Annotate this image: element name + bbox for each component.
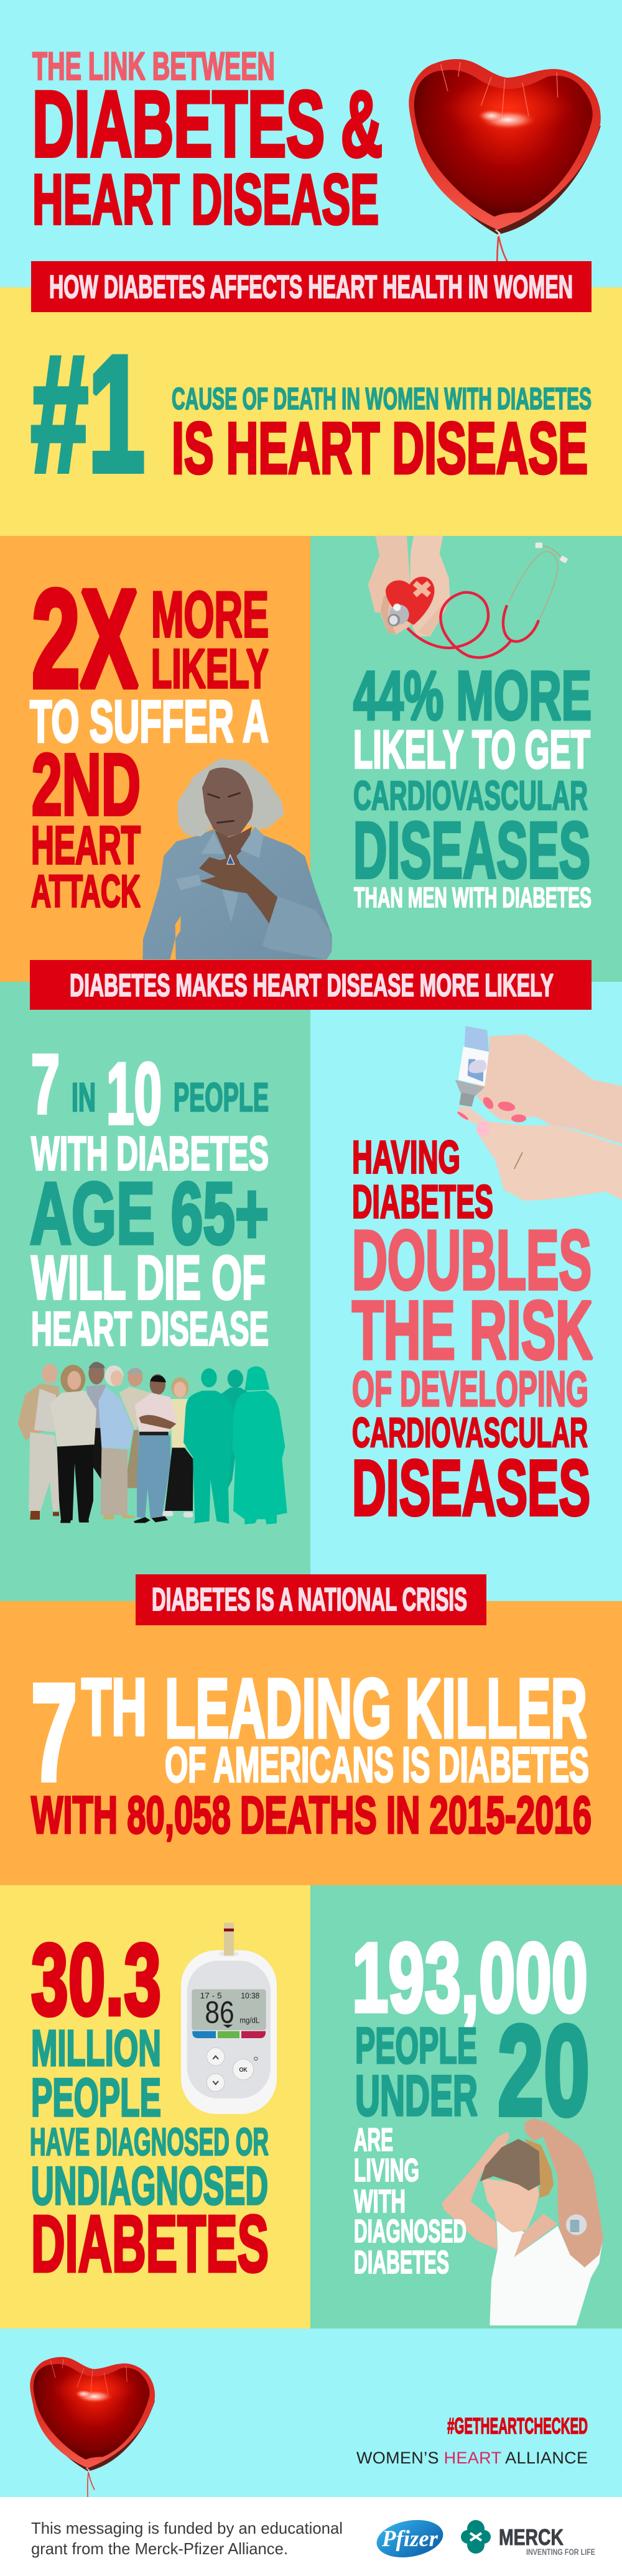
panel: doubles the risk — [310, 982, 622, 1601]
text: 2nd: 2ND — [32, 736, 141, 833]
text: with: WITH — [354, 2184, 406, 2220]
panel: funding footer — [0, 2497, 622, 2576]
text: diabetes: DIABETES — [352, 1175, 493, 1227]
text: having: HAVING — [352, 1132, 460, 1183]
image: hands holding heart with stethoscope — [368, 536, 568, 658]
panel: 7th leading killer — [0, 1601, 622, 1885]
text: have diagnosed or: HAVE DIAGNOSED OR — [30, 2121, 269, 2164]
image: hands using lancet device — [455, 1026, 622, 1201]
stat: 10: 10 — [106, 1045, 162, 1142]
logo: Merck — [461, 2520, 595, 2557]
stat: #1: #1 — [31, 322, 145, 506]
icon: glucose meter: OK — [239, 2067, 248, 2074]
panel: 2x more likely — [0, 536, 332, 982]
panel: 44 percent more likely — [310, 536, 622, 982]
text: under: UNDER — [355, 2064, 478, 2128]
text: with diabetes: WITH DIABETES — [31, 1127, 269, 1180]
image: group of seven older adults with three silhouettes — [17, 1362, 287, 1525]
panel: number one cause — [0, 287, 622, 536]
text: funding statement: grant from the Merck-Pfizer Alliance. — [31, 2539, 288, 2558]
text: million: MILLION — [31, 2020, 161, 2077]
text: people: PEOPLE — [174, 1075, 269, 1120]
text: people: PEOPLE — [31, 2068, 161, 2128]
panel: 30.3 million people — [0, 1885, 310, 2329]
text: undiagnosed: UNDIAGNOSED — [31, 2156, 268, 2216]
text: attack: ATTACK — [31, 867, 141, 916]
panel: closing call to action — [0, 2329, 622, 2498]
icon: glucose meter: 86 — [205, 1995, 234, 2029]
text: living: LIVING — [354, 2153, 419, 2189]
text: diagnosed: DIAGNOSED — [354, 2214, 466, 2250]
heading: the link between: THE LINK BETWEEN — [32, 45, 275, 88]
logo: Pfizer — [374, 2515, 446, 2562]
text: to suffer a: TO SUFFER A — [30, 688, 269, 755]
text: heart disease: HEART DISEASE — [31, 1302, 269, 1355]
heading: heart disease: HEART DISEASE — [32, 160, 379, 239]
banner: diabetes is a national crisis — [136, 1574, 486, 1625]
logo: Merck: INVENTING FOR LIFE — [526, 2547, 595, 2557]
icon: glucose meter: 10:38 — [241, 1991, 259, 2000]
text: likely: LIKELY — [151, 637, 269, 699]
image: older woman with hand on chest — [142, 759, 332, 959]
icon: glucose meter — [181, 1923, 277, 2114]
stat: 30.3: 30.3 — [31, 1923, 161, 2036]
icon: glucose meter: 17 - 5 — [200, 1991, 222, 2000]
stat: 7: 7 — [31, 1037, 60, 1131]
text: age 65+: AGE 65+ — [30, 1164, 269, 1262]
banner: diabetes makes heart disease more likely — [30, 960, 592, 1010]
panel: title header — [0, 0, 622, 287]
icon: small heart balloon — [30, 2357, 155, 2498]
text: more: MORE — [151, 579, 269, 651]
banner: how diabetes affects heart health in women — [31, 261, 592, 312]
text: people: PEOPLE — [355, 2018, 477, 2074]
text: funding statement — [31, 2519, 343, 2558]
stat: 2X: 2X — [32, 561, 138, 716]
panel: 193,000 people under 20 — [310, 1885, 622, 2329]
panel: 7 in 10 people — [0, 982, 310, 1601]
text: will die of: WILL DIE OF — [31, 1243, 266, 1312]
text: in: IN — [72, 1075, 96, 1120]
text: heart: HEART — [31, 816, 141, 875]
text: are: ARE — [354, 2122, 393, 2158]
icon: red heart balloon — [409, 59, 601, 275]
text: diabetes: DIABETES — [31, 2199, 269, 2289]
heading: diabetes and: DIABETES & — [32, 72, 383, 176]
logo: women's heart alliance: WOMEN’S HEART ALLIANCE — [356, 2449, 588, 2467]
stat: th: TH — [81, 1661, 147, 1752]
stat: 7: 7 — [31, 1655, 77, 1809]
text: funding statement: This messaging is funded by an educational — [31, 2519, 343, 2537]
text: diabetes: DIABETES — [354, 2245, 449, 2281]
image: young woman with glucose sensor — [442, 2118, 603, 2325]
icon: glucose meter: mg/dL — [239, 2016, 259, 2024]
logo: Pfizer: Pfizer — [381, 2526, 439, 2552]
logo: Merck: MERCK — [499, 2524, 564, 2550]
